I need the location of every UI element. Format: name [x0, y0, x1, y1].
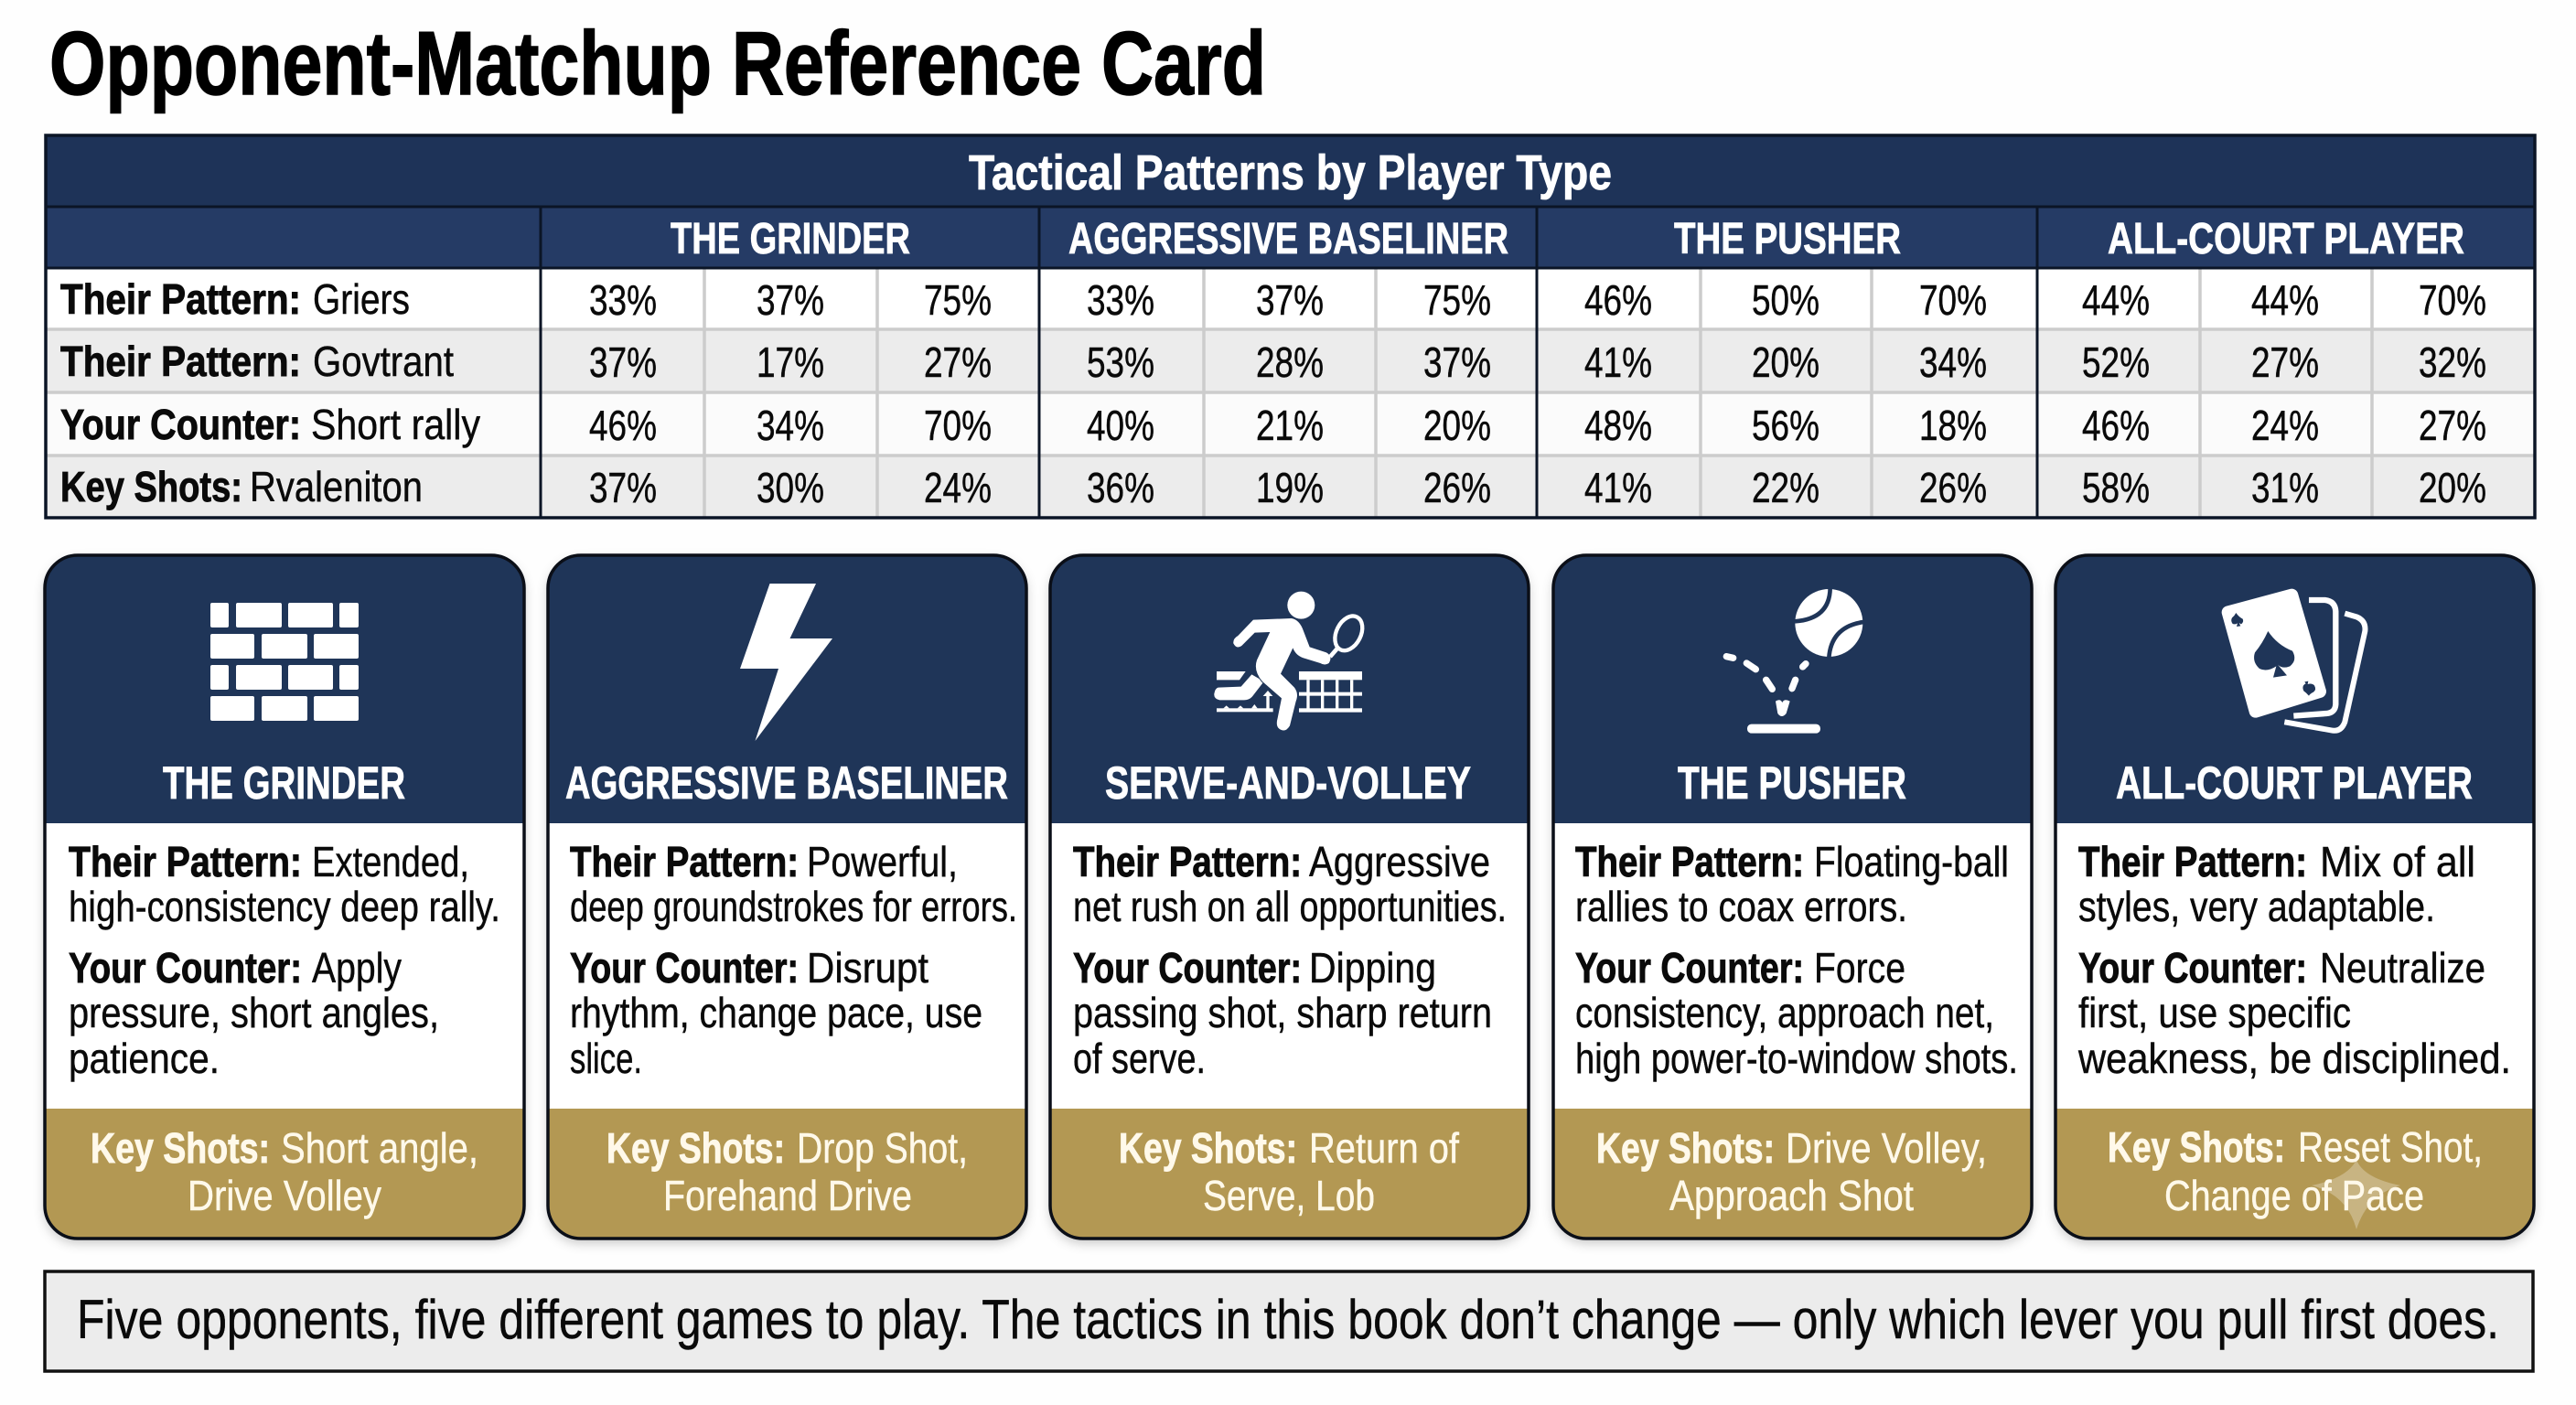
table values: 24%: [924, 464, 992, 511]
card body: weakness, be disciplined.: [2077, 1035, 2511, 1082]
table values: 52%: [2082, 338, 2150, 386]
card body: Their Pattern:: [69, 838, 302, 885]
table values: 27%: [2419, 402, 2486, 449]
table values: 34%: [757, 402, 824, 449]
table values: 27%: [924, 338, 992, 386]
column headers: THE GRINDER: [671, 215, 910, 263]
column headers: AGGRESSIVE BASELINER: [1068, 215, 1508, 263]
card body: high-consistency deep rally.: [69, 883, 500, 930]
table values: 41%: [1584, 464, 1652, 511]
card body: patience.: [69, 1035, 220, 1082]
table values: 50%: [1752, 276, 1819, 324]
table values: 75%: [1423, 276, 1491, 324]
table values: 20%: [2419, 464, 2486, 511]
table values: 70%: [2419, 276, 2486, 324]
table values: 20%: [1752, 338, 1819, 386]
icon: brick wall: [210, 603, 359, 721]
table values: [589, 276, 2486, 511]
key shots: Short angle,: [281, 1124, 478, 1172]
table values: 41%: [1584, 338, 1652, 386]
card body: styles, very adaptable.: [2078, 883, 2435, 930]
key shots: [1119, 1124, 1459, 1219]
card heading: AGGRESSIVE BASELINER: [565, 757, 1008, 809]
row labels: [60, 275, 480, 510]
table values: 37%: [1256, 276, 1324, 324]
card body: rhythm, change pace, use: [570, 989, 982, 1036]
key shots: Drop Shot,: [797, 1124, 968, 1172]
table values: 32%: [2419, 338, 2486, 386]
table values: 37%: [589, 464, 657, 511]
row labels: Their Pattern:: [60, 275, 301, 323]
card heading: THE GRINDER: [163, 757, 405, 809]
key shots: Drive Volley: [188, 1172, 381, 1219]
key shots: [606, 1124, 968, 1219]
table values: 46%: [1584, 276, 1652, 324]
table values: 70%: [924, 402, 992, 449]
card body: Dipping: [1309, 944, 1436, 992]
table values: 27%: [2251, 338, 2319, 386]
table values: 37%: [589, 338, 657, 386]
key shots: [91, 1124, 478, 1219]
column headers: [671, 215, 2464, 263]
card body: Extended,: [312, 838, 469, 885]
card body: slice.: [570, 1035, 642, 1082]
card body: [570, 838, 1017, 1082]
key shots: Return of: [1309, 1124, 1459, 1172]
table values: 20%: [1423, 402, 1491, 449]
key shots: Key Shots:: [606, 1124, 785, 1172]
card body: Apply: [312, 944, 402, 992]
card body: Force: [1814, 944, 1905, 992]
table values: 31%: [2251, 464, 2319, 511]
key shots: Key Shots:: [1596, 1124, 1775, 1172]
card body: [2077, 838, 2511, 1082]
table values: 48%: [1584, 402, 1652, 449]
icon: bouncing ball: [1726, 588, 1863, 734]
table values: 26%: [1423, 464, 1491, 511]
card body: Your Counter:: [570, 944, 799, 992]
card body: net rush on all opportunities.: [1073, 883, 1507, 930]
table values: 18%: [1919, 402, 1987, 449]
table values: 36%: [1087, 464, 1154, 511]
table values: 21%: [1256, 402, 1324, 449]
table values: 40%: [1087, 402, 1154, 449]
card body: [69, 838, 500, 1082]
key shots: [1596, 1124, 1987, 1219]
table values: 30%: [757, 464, 824, 511]
icon: tennis player at net: [1214, 592, 1368, 731]
panel: tactical patterns table: [46, 135, 2535, 518]
row labels: Their Pattern:: [60, 338, 301, 385]
card body: Neutralize: [2320, 944, 2485, 992]
key shots: Key Shots:: [2108, 1123, 2285, 1171]
row labels: Rvaleniton: [250, 463, 423, 510]
column headers: ALL-COURT PLAYER: [2108, 215, 2464, 263]
table values: 33%: [589, 276, 657, 324]
card body: Their Pattern:: [570, 838, 799, 885]
table values: 17%: [757, 338, 824, 386]
row labels: Griers: [313, 275, 410, 323]
card body: Powerful,: [807, 838, 958, 885]
table values: 19%: [1256, 464, 1324, 511]
table values: 28%: [1256, 338, 1324, 386]
table values: 24%: [2251, 402, 2319, 449]
card body: Their Pattern:: [1575, 838, 1804, 885]
title: Opponent-Matchup Reference Card: [49, 13, 1266, 113]
card body: Their Pattern:: [2078, 838, 2307, 885]
card heading: SERVE-AND-VOLLEY: [1105, 757, 1471, 809]
key shots: Reset Shot,: [2298, 1123, 2483, 1171]
card body: rallies to coax errors.: [1575, 883, 1907, 930]
table values: 56%: [1752, 402, 1819, 449]
key shots: Drive Volley,: [1786, 1124, 1987, 1172]
column headers: THE PUSHER: [1674, 215, 1901, 263]
table values: 75%: [924, 276, 992, 324]
card body: Aggressive: [1309, 838, 1490, 885]
card body: first, use specific: [2078, 989, 2351, 1036]
card body: consistency, approach net,: [1575, 989, 1994, 1036]
table values: 46%: [2082, 402, 2150, 449]
card body: pressure, short angles,: [69, 989, 439, 1036]
table values: 33%: [1087, 276, 1154, 324]
table values: 70%: [1919, 276, 1987, 324]
panel: aggressive baseliner card: [548, 555, 1026, 1239]
card body: Your Counter:: [69, 944, 302, 992]
table values: 26%: [1919, 464, 1987, 511]
table heading: Tactical Patterns by Player Type: [969, 145, 1612, 200]
card body: Your Counter:: [1575, 944, 1804, 992]
row labels: Short rally: [311, 401, 480, 448]
key shots: Key Shots:: [91, 1124, 270, 1172]
card body: Your Counter:: [2078, 944, 2307, 992]
footer callout: [45, 1271, 2533, 1371]
key shots: Key Shots:: [1119, 1124, 1297, 1172]
table values: 22%: [1752, 464, 1819, 511]
card body: Floating-ball: [1814, 838, 2009, 885]
table values: 53%: [1087, 338, 1154, 386]
key shots: Forehand Drive: [663, 1172, 912, 1219]
key shots: Serve, Lob: [1203, 1172, 1375, 1219]
card body: deep groundstrokes for errors.: [570, 883, 1017, 930]
table values: 34%: [1919, 338, 1987, 386]
icon: playing cards: [2228, 595, 2365, 731]
card body: high power-to-window shots.: [1575, 1035, 2018, 1082]
panel: the pusher card: [1553, 555, 2032, 1239]
table values: 46%: [589, 402, 657, 449]
row labels: Govtrant: [313, 338, 454, 385]
card body: passing shot, sharp return: [1073, 989, 1492, 1036]
card body: Your Counter:: [1073, 944, 1302, 992]
card heading: THE PUSHER: [1678, 757, 1906, 809]
key shots: Approach Shot: [1669, 1172, 1914, 1219]
card body: Disrupt: [807, 944, 928, 992]
table values: 37%: [1423, 338, 1491, 386]
card body: Their Pattern:: [1073, 838, 1302, 885]
card body: [1575, 838, 2018, 1082]
panel: the grinder card: [45, 555, 524, 1239]
table values: 37%: [757, 276, 824, 324]
panel: all-court player card: [2055, 555, 2534, 1239]
row labels: Key Shots:: [60, 463, 242, 510]
panel: serve-and-volley card: [1050, 555, 1529, 1239]
card heading: ALL-COURT PLAYER: [2116, 757, 2473, 809]
table values: 44%: [2251, 276, 2319, 324]
card body: [1073, 838, 1507, 1082]
table values: 58%: [2082, 464, 2150, 511]
key shots: Change of Pace: [2164, 1172, 2424, 1219]
row labels: Your Counter:: [60, 401, 301, 448]
key shots: [2108, 1123, 2483, 1219]
sparkle mark: [2312, 1160, 2400, 1229]
icon: lightning bolt: [740, 584, 832, 741]
card body: of serve.: [1073, 1035, 1206, 1082]
table values: 44%: [2082, 276, 2150, 324]
card body: Mix of all: [2320, 838, 2475, 885]
